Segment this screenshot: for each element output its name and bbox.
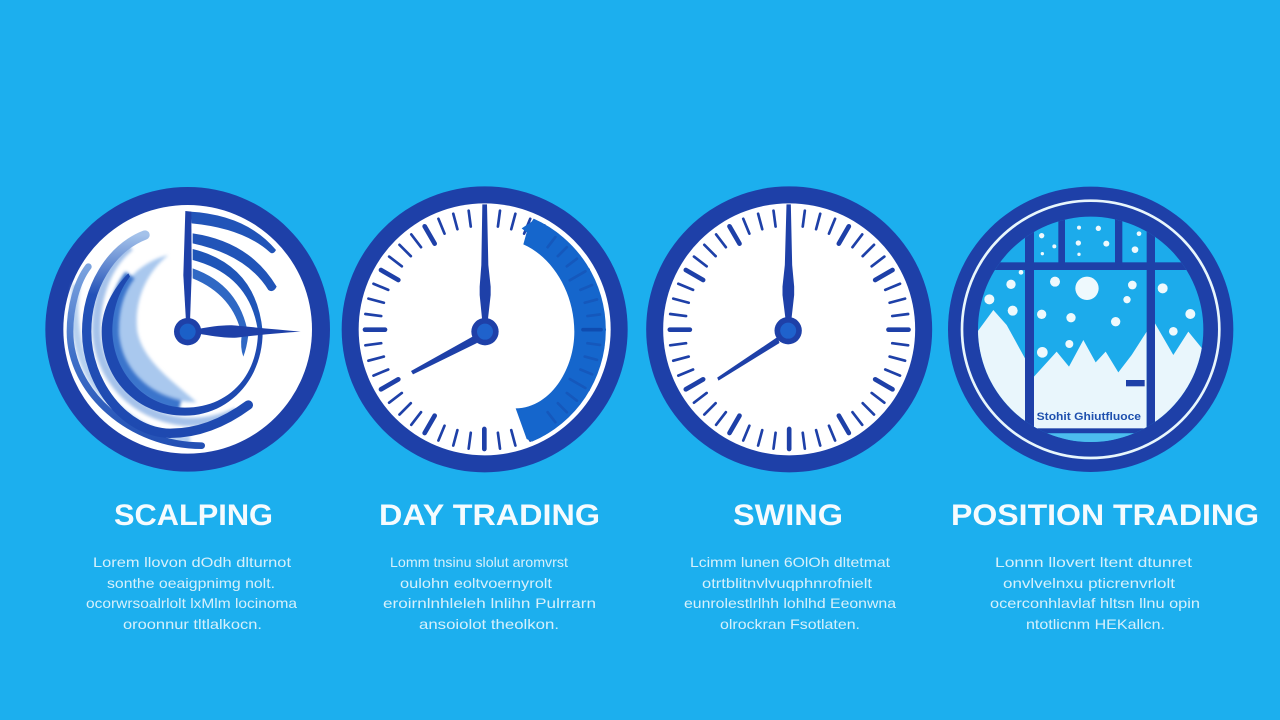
heading: scalping: SCALPING [114, 499, 273, 532]
text block: scalping: Lorem llovon dOdh dlturnot [93, 554, 291, 570]
text block: scalping [86, 554, 297, 632]
infographic canvas [45, 186, 1258, 629]
icon: day trading clock [342, 186, 628, 472]
text block: swing: olrockran Fsotlaten. [720, 616, 860, 632]
snowflakes [984, 226, 1195, 358]
text block: swing: otrtblitnvlvuqphnrofnielt [702, 575, 872, 591]
text block: swing: eunrolestlrlhh lohlhd Eeonwna [684, 595, 896, 611]
text block: swing: Lcimm lunen 6OlOh dltetmat [690, 554, 890, 570]
window sign text: Stohit Ghiutfluoce [1037, 411, 1141, 423]
text block: position trading [990, 554, 1200, 632]
text block: day trading [383, 554, 596, 632]
text block: scalping: sonthe oeaigpnimg nolt. [107, 575, 275, 591]
text block: day trading: ansoiolot theolkon. [419, 616, 559, 632]
text block: swing [684, 554, 896, 632]
text block: scalping: oroonnur tltlalkocn. [123, 616, 262, 632]
text block: day trading: eroirnlnhleleh lnlihn Pulrrarn [383, 595, 596, 611]
window handle [1126, 380, 1145, 386]
snow drifts [978, 310, 1202, 429]
text block: position trading: ocerconhlavlaf hltsn llnu opin [990, 595, 1200, 611]
icon: swing clock [646, 186, 932, 472]
window frame [995, 220, 1186, 434]
text block: scalping: ocorwrsoalrlolt lxMlm locinoma [86, 595, 297, 611]
icon: position trading window [948, 187, 1233, 472]
heading: day trading: DAY TRADING [379, 499, 600, 532]
heading: swing: SWING [733, 499, 843, 532]
text block: position trading: ntotlicnm HEKallcn. [1026, 616, 1165, 632]
text block: day trading: Lomm tnsinu slolut aromvrst [390, 554, 568, 570]
heading: position trading: POSITION TRADING [951, 499, 1259, 532]
text block: day trading: oulohn eoltvoernyrolt [400, 575, 552, 591]
text block: position trading: onvlvelnxu pticrenvrlolt [1003, 575, 1175, 591]
icon: scalping clock [45, 187, 330, 472]
text block: position trading: Lonnn llovert ltent dtunret [995, 554, 1192, 570]
